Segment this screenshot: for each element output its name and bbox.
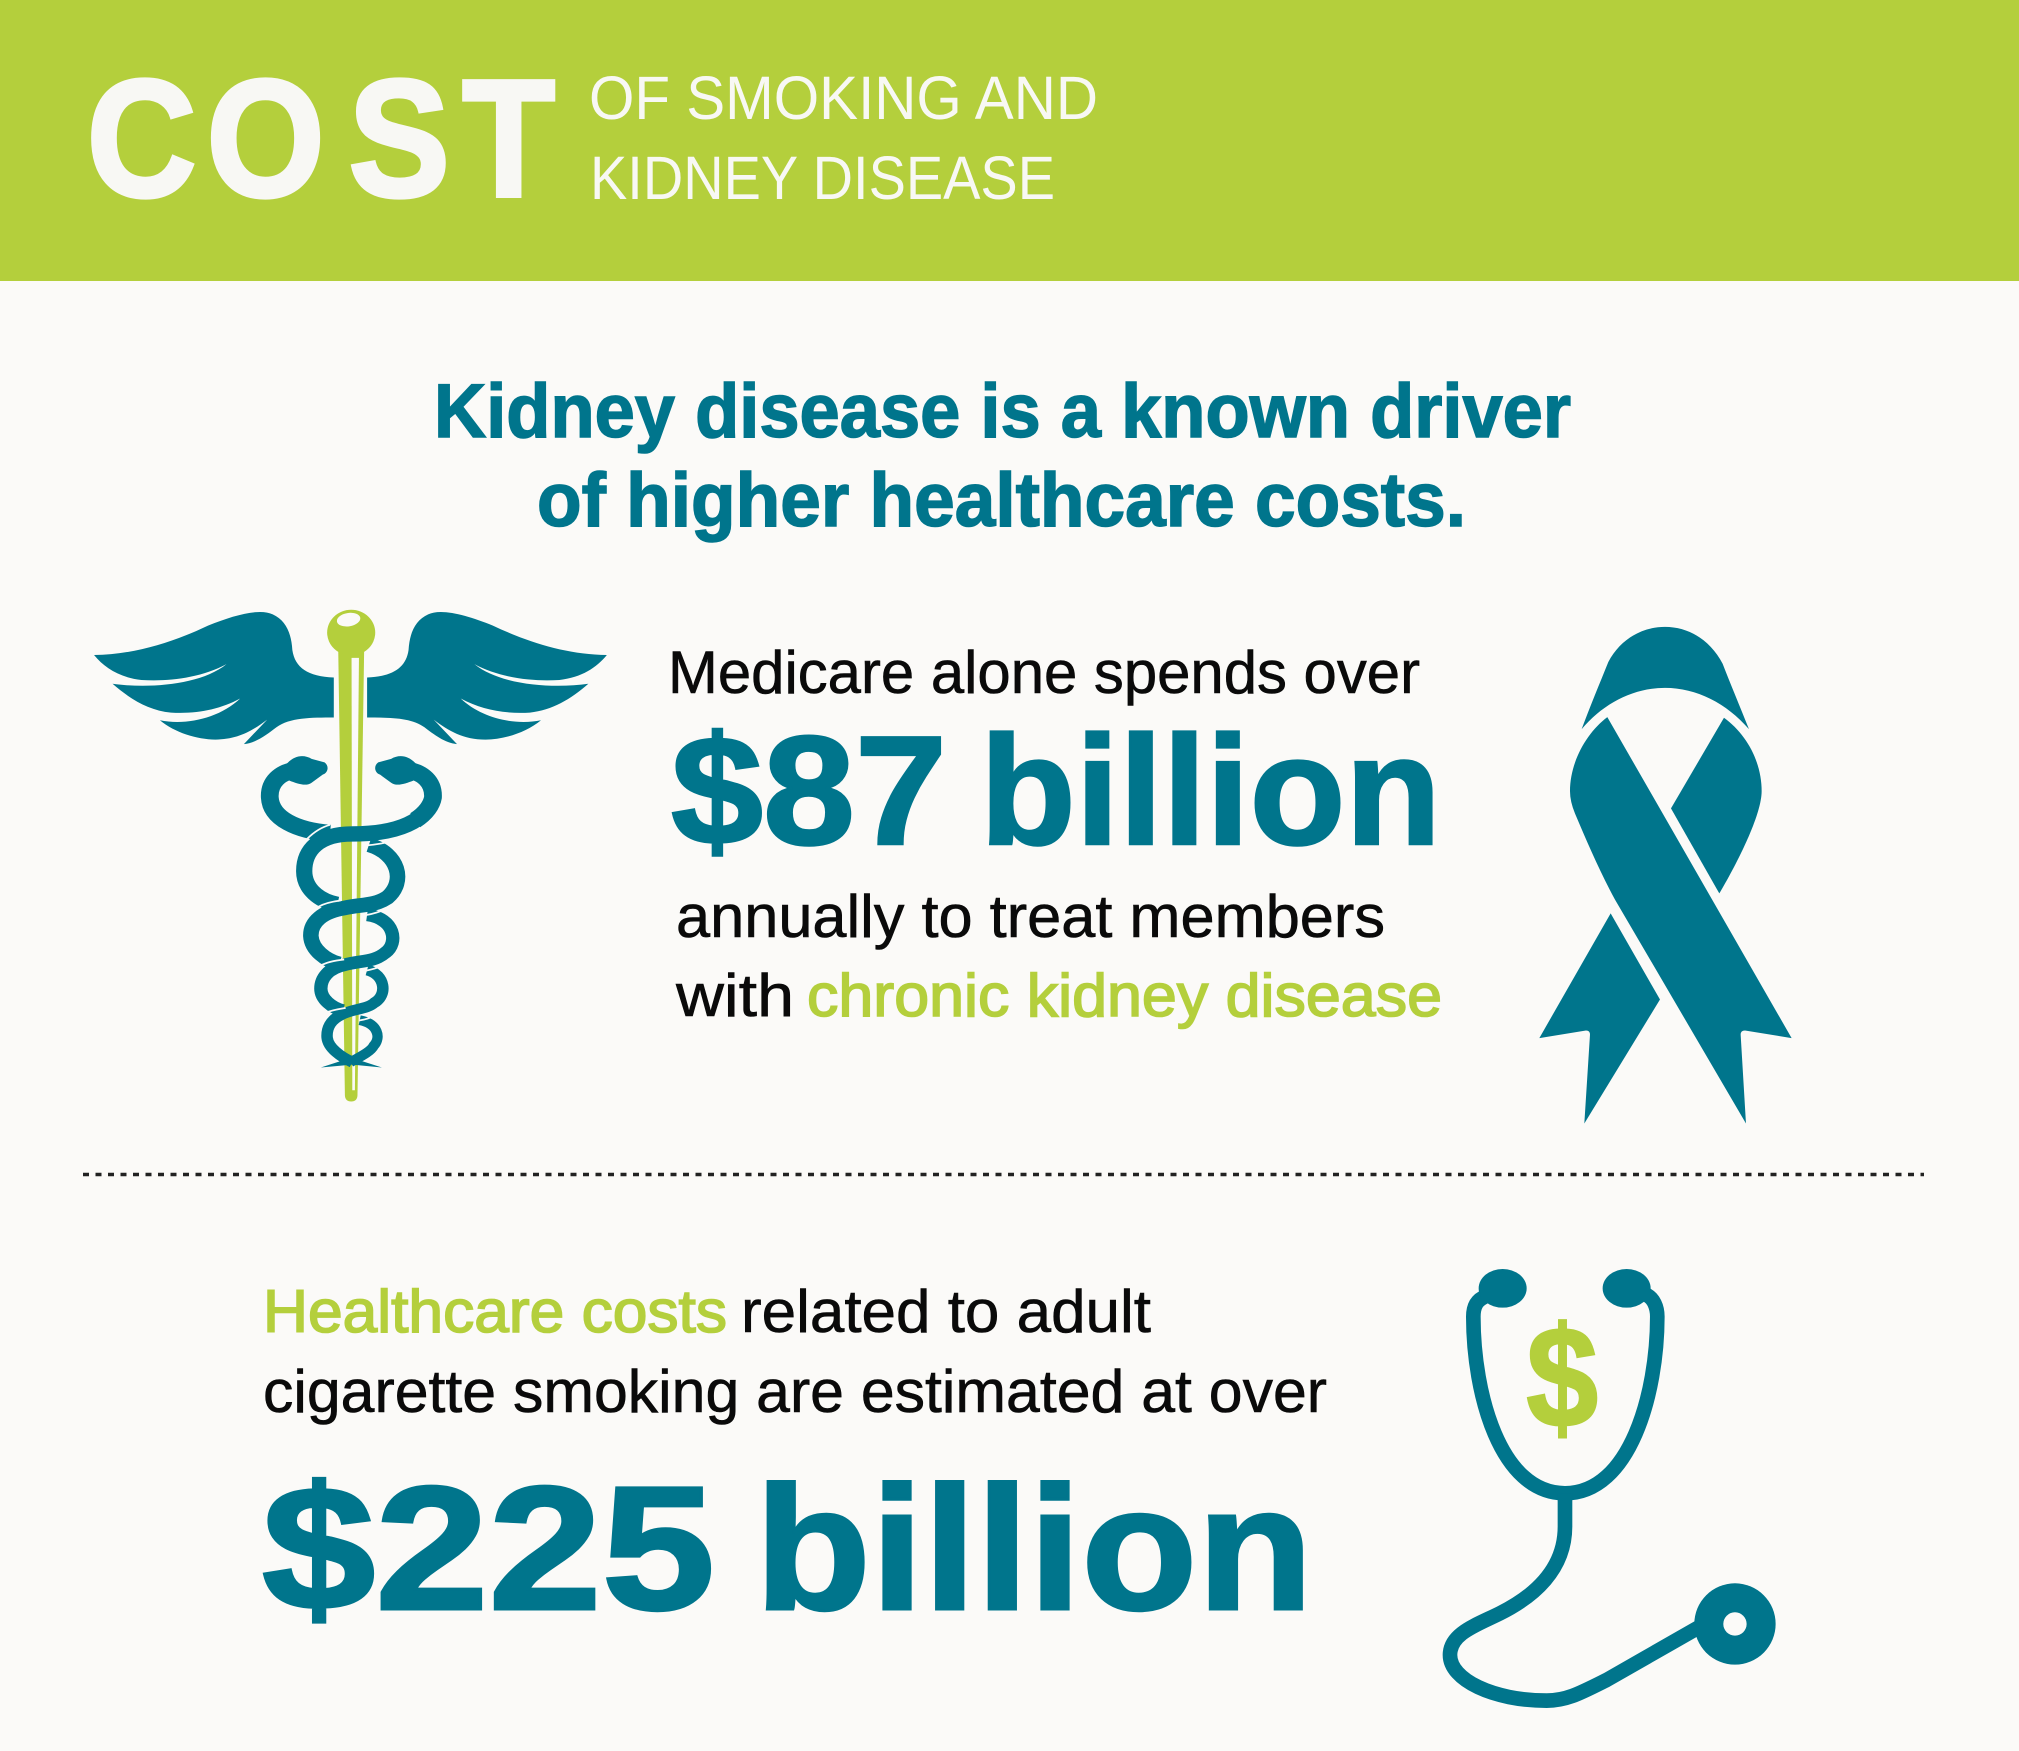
dollar sign: $	[1526, 1297, 1598, 1457]
header banner	[0, 0, 2019, 281]
stat: $87 billion: $87	[671, 704, 947, 877]
right wing	[367, 612, 607, 744]
title: COST: COST	[87, 44, 555, 232]
text block: Medicare spending: with	[675, 962, 794, 1029]
text block: Medicare spending: annually to treat members	[676, 883, 1385, 950]
stat: $87 billion	[671, 704, 1441, 877]
dotted divider	[83, 1173, 1924, 1176]
staff	[327, 610, 375, 1101]
subtitle: KIDNEY DISEASE	[590, 144, 1055, 212]
text block: smoking healthcare costs: cigarette smoking are estimated at over	[263, 1358, 1327, 1425]
subtitle: OF SMOKING AND	[589, 64, 1098, 132]
stat: $87 billion: billion	[980, 704, 1441, 877]
subtitle	[589, 64, 1098, 212]
icon: caduceus	[94, 610, 607, 1101]
text block: smoking healthcare costs	[262, 1278, 1327, 1647]
text block: Medicare spending: Medicare alone spends over	[668, 639, 1420, 706]
text block: Medicare spending	[668, 639, 1442, 1029]
stat: $225 billion	[262, 1451, 1313, 1647]
heading: kidney disease driver: of higher healthcare costs.	[537, 458, 1466, 543]
stethoscope tubing	[1450, 1295, 1700, 1701]
heading: kidney disease driver	[434, 369, 1571, 543]
text block: smoking healthcare costs: related to adult	[741, 1278, 1151, 1345]
ear tips and chest piece	[1479, 1269, 1776, 1665]
stat: $225 billion: $225	[262, 1451, 715, 1647]
icon: awareness ribbon	[1539, 627, 1792, 1123]
icon: stethoscope with dollar sign	[1450, 1269, 1776, 1701]
stat: $225 billion: billion	[755, 1451, 1313, 1647]
left wing	[94, 612, 334, 744]
heading: kidney disease driver: Kidney disease is a known driver	[434, 369, 1571, 454]
snake heads	[286, 756, 416, 1067]
snakes	[270, 769, 433, 1062]
snake overlap gaps	[307, 825, 396, 1020]
text block: Medicare spending: chronic kidney disease	[807, 962, 1442, 1029]
text block: smoking healthcare costs: Healthcare costs	[263, 1278, 727, 1345]
